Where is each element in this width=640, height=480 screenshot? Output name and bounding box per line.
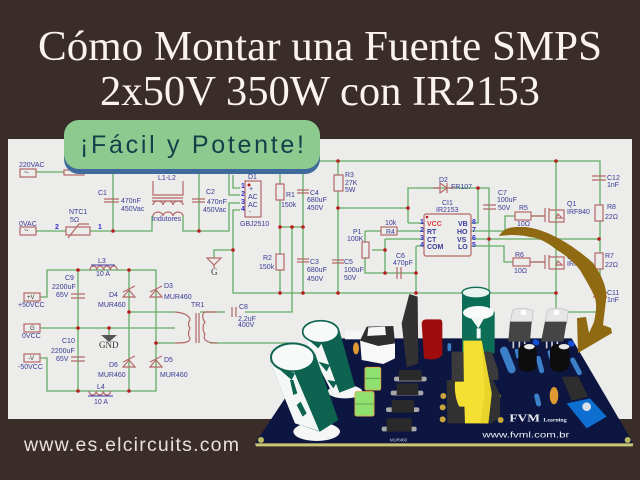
pin numbers: 4 — [241, 206, 245, 213]
schematic labels: D3 — [164, 283, 173, 290]
schematic labels: Q1 — [567, 201, 576, 208]
pin numbers: 5 — [472, 242, 476, 249]
schematic labels: C12 — [607, 175, 620, 182]
schematic labels: 65V — [56, 356, 69, 363]
schematic labels — [18, 162, 620, 406]
panel: schematic — [8, 139, 632, 419]
schematic labels: 100K — [347, 236, 364, 243]
pcb 3d render — [255, 287, 633, 446]
main transformer — [440, 341, 504, 423]
pin numbers: 3 — [241, 199, 245, 206]
schematic labels: IRF840 — [567, 209, 590, 216]
schematic labels: MUR460 — [98, 302, 126, 309]
schematic labels: G — [30, 326, 35, 332]
pin numbers: 2 — [241, 191, 245, 198]
pin numbers: 7 — [472, 227, 476, 234]
output section components — [24, 265, 236, 396]
schematic labels: 450V — [307, 205, 324, 212]
pcb board — [255, 338, 633, 443]
schematic labels: CI1 — [442, 200, 453, 207]
schematic labels: 150k — [259, 264, 275, 271]
schematic labels: VS — [457, 237, 467, 244]
schematic labels: 150k — [281, 202, 297, 209]
schematic labels: C4 — [310, 190, 319, 197]
driver ic and trimmer — [550, 377, 607, 428]
pin numbers — [55, 183, 476, 249]
schematic labels: 680uF — [307, 197, 327, 204]
schematic labels: C11 — [607, 290, 619, 297]
schematic labels: AC — [248, 202, 258, 209]
schematic labels: D1 — [248, 174, 257, 181]
schematic labels: 50V — [498, 205, 511, 212]
schematic labels: 400V — [238, 322, 255, 329]
pin numbers: 2 — [420, 227, 424, 234]
wires — [36, 161, 600, 391]
schematic labels: Q2 — [567, 254, 576, 261]
schematic labels: 27K — [345, 180, 358, 187]
schematic labels: ~ — [24, 226, 29, 235]
pcb silkscreen text: www.fvml.com.br — [481, 430, 569, 440]
mosfets — [508, 308, 568, 348]
schematic labels: C8 — [239, 304, 248, 311]
pin numbers: 3 — [420, 235, 424, 242]
schematic labels: C10 — [62, 338, 75, 345]
schematic labels: Indutores — [152, 216, 182, 223]
schematic labels: R5 — [519, 205, 528, 212]
schematic labels: MUR460 — [164, 294, 192, 301]
schematic labels: 0VAC — [19, 221, 37, 228]
diodes: MUR460 — [390, 437, 408, 442]
schematic labels: R4 — [386, 229, 395, 236]
driver section components — [362, 176, 607, 297]
pcb silkscreen text: Learning — [543, 419, 567, 424]
arrow — [499, 227, 612, 353]
pcb silkscreen text — [481, 414, 569, 440]
schematic labels: 22Ω — [605, 262, 618, 269]
schematic labels: HO — [457, 229, 468, 236]
pcb silkscreen text: FVM — [509, 414, 540, 425]
schematic labels: D4 — [109, 292, 118, 299]
schematic labels: P1 — [353, 229, 362, 236]
schematic labels: C3 — [310, 259, 319, 266]
pin numbers: 1 — [98, 224, 102, 231]
schematic labels: 10 A — [94, 399, 108, 406]
blue resistors — [449, 342, 579, 404]
schematic labels: R3 — [345, 172, 354, 179]
title: 2x50V 350W con IR2153 — [100, 69, 540, 115]
badge: ¡Fácil y Potente! — [80, 131, 304, 159]
schematic labels: 100uF — [344, 267, 364, 274]
pin numbers: 6 — [472, 235, 476, 242]
footer url: www.es.elcircuits.com — [23, 434, 239, 456]
schematic labels: L4 — [97, 384, 105, 391]
schematic labels: R1 — [286, 192, 295, 199]
ground labels: GND — [99, 340, 119, 350]
schematic labels: D2 — [439, 177, 448, 184]
pin numbers: 8 — [472, 219, 476, 226]
schematic labels: C6 — [396, 253, 405, 260]
badge — [64, 120, 320, 174]
schematic labels: C2 — [206, 189, 215, 196]
schematic labels: 22Ω — [605, 214, 618, 221]
pin numbers: VCC — [427, 221, 442, 228]
schematic labels: 2200uF — [51, 348, 75, 355]
schematic labels: D5 — [164, 357, 173, 364]
schematic labels: R6 — [515, 252, 524, 259]
bridge rectifier — [402, 294, 418, 367]
schematic labels: L3 — [98, 258, 106, 265]
schematic labels: +V — [27, 295, 35, 301]
white fuse and relay — [345, 326, 395, 364]
schematic labels: COM — [427, 244, 444, 251]
schematic labels: - — [249, 209, 252, 216]
schematic labels: R8 — [607, 204, 616, 211]
schematic labels: C9 — [65, 275, 74, 282]
schematic labels: IR2153 — [436, 207, 459, 214]
schematic labels: R7 — [605, 253, 614, 260]
schematic labels: C7 — [498, 190, 507, 197]
schematic labels: 220VAC — [19, 162, 45, 169]
schematic labels: +50VCC — [18, 302, 45, 309]
schematic labels: C5 — [344, 259, 353, 266]
schematic labels: RT — [427, 229, 437, 236]
schematic labels: ~ — [24, 168, 29, 177]
schematic labels: 65V — [56, 292, 69, 299]
schematic labels: R2 — [263, 255, 272, 262]
schematic labels: 470nF — [121, 198, 141, 205]
schematic labels: 100uF — [497, 197, 517, 204]
green inductors — [355, 367, 381, 416]
schematic labels: 1nF — [607, 297, 619, 304]
schematic labels: 0VCC — [22, 333, 41, 340]
schematic labels: 450Vac — [121, 206, 145, 213]
vertical capacitors — [462, 287, 495, 353]
schematic labels: 470nF — [207, 199, 227, 206]
schematic labels: MUR460 — [98, 372, 126, 379]
schematic labels: 50V — [344, 275, 357, 282]
schematic labels: 10k — [385, 220, 397, 227]
schematic labels: 5W — [345, 187, 356, 194]
title — [38, 24, 602, 115]
black capacitors — [518, 344, 569, 372]
schematic labels: MUR460 — [160, 372, 188, 379]
schematic labels: TR1 — [191, 302, 204, 309]
schematic labels: 680uF — [307, 267, 327, 274]
schematic labels: FR107 — [451, 184, 472, 191]
pin numbers: 2 — [55, 224, 59, 231]
schematic labels: CT — [427, 237, 437, 244]
schematic labels: AC — [248, 194, 258, 201]
schematic labels: -V — [28, 356, 34, 362]
schematic labels: 5Ω — [70, 217, 79, 224]
schematic labels: 2,2uF — [238, 316, 256, 323]
input section components — [20, 169, 344, 270]
schematic labels: 450Vac — [203, 207, 227, 214]
schematic labels: C1 — [98, 190, 107, 197]
schematic labels: -50VCC — [18, 364, 43, 371]
large capacitors — [270, 321, 362, 441]
title: Cómo Montar una Fuente SMPS — [38, 24, 602, 70]
ground labels: G — [211, 267, 218, 277]
schematic labels: 2200uF — [52, 284, 76, 291]
schematic labels: NTC1 — [69, 209, 87, 216]
ground labels — [99, 267, 218, 350]
schematic labels: 10Ω — [514, 268, 527, 275]
schematic labels: VB — [458, 221, 468, 228]
red capacitor — [422, 319, 442, 359]
schematic labels: 1nF — [607, 182, 619, 189]
nodes — [76, 159, 601, 393]
diodes — [382, 370, 427, 442]
schematic labels: L1-L2 — [158, 175, 176, 182]
pin numbers: 1 — [420, 219, 424, 226]
schematic labels: 10 A — [96, 271, 110, 278]
schematic labels: 450V — [307, 276, 324, 283]
schematic labels: GBJ2510 — [240, 221, 269, 228]
schematic labels: + — [249, 186, 253, 193]
schematic labels: 470pF — [393, 260, 413, 267]
schematic labels: 10Ω — [517, 221, 530, 228]
schematic labels: D6 — [109, 362, 118, 369]
schematic labels: IRF — [567, 261, 578, 268]
schematic labels: LO — [458, 244, 468, 251]
pin numbers: 4 — [420, 242, 424, 249]
pin numbers: 1 — [241, 183, 245, 190]
